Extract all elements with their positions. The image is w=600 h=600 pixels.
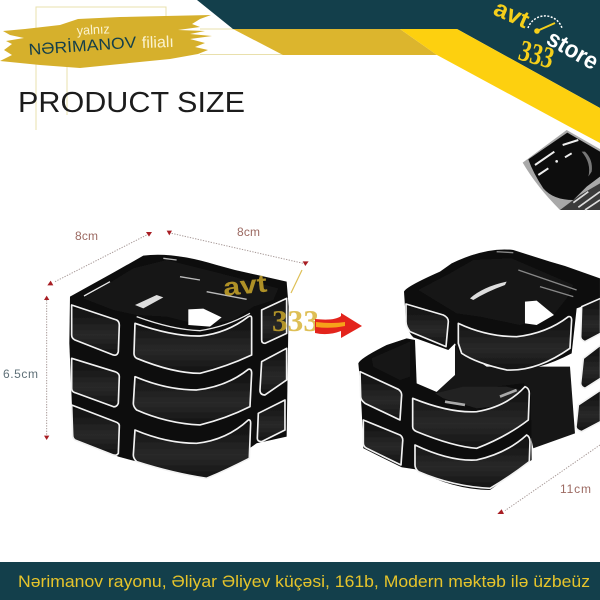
dimension label 11cm: 11cm bbox=[560, 482, 591, 496]
thumbnail product photo bbox=[523, 130, 600, 210]
header yellow band bbox=[400, 29, 600, 143]
dimension line: 8cm left bbox=[47, 232, 152, 285]
watermark avt 333 bbox=[222, 269, 319, 338]
footer bar bbox=[0, 562, 600, 600]
footer address text: Nərimanov rayonu, Əliyar Əliyev küçəsi, 161b, Modern məktəb ilə üzbeüz bbox=[18, 572, 590, 591]
logo: avt store 333 bbox=[490, 0, 600, 76]
cube front panels bbox=[133, 316, 252, 478]
cube left panels bbox=[72, 305, 119, 455]
dimension line: 11cm bbox=[497, 445, 600, 514]
lower tier front panels bbox=[413, 387, 530, 488]
upper tier opening bbox=[418, 258, 573, 325]
dimension label 8cm right: 8cm bbox=[237, 225, 260, 239]
cube opening bbox=[83, 260, 278, 325]
dimension line: 6.5cm height bbox=[44, 296, 49, 440]
upper tier left panel bbox=[406, 304, 448, 347]
logo gauge icon bbox=[528, 16, 562, 34]
watermark avt 333: 333 bbox=[272, 303, 319, 338]
back dark column bbox=[435, 345, 575, 448]
title: PRODUCT SIZE bbox=[18, 87, 245, 119]
red arrow bbox=[315, 313, 362, 338]
Nərimanov text: NƏRİMANOV bbox=[28, 32, 137, 59]
brush stroke bbox=[0, 15, 212, 68]
watermark avt 333: avt bbox=[222, 269, 269, 302]
right opened cube bbox=[358, 249, 600, 514]
lower tier left panels bbox=[360, 372, 403, 465]
header thin gold frame lines bbox=[36, 7, 283, 130]
upper tier body bbox=[404, 249, 600, 371]
logo number 333: 333 bbox=[515, 34, 558, 75]
dimension line: 8cm right bbox=[167, 231, 309, 266]
filiali text: filialı bbox=[142, 34, 174, 52]
left cube with dimensions bbox=[44, 231, 309, 478]
dimension label 8cm left: 8cm bbox=[75, 229, 98, 243]
right side panels bbox=[576, 298, 600, 432]
branch label on brush stroke bbox=[0, 15, 212, 68]
header dark teal banner bbox=[197, 0, 600, 108]
cube right panels bbox=[257, 298, 287, 442]
header dark gold band bbox=[233, 29, 437, 55]
cube interior see-through bbox=[188, 309, 222, 327]
lower tier highlights bbox=[445, 390, 517, 405]
upper tier see-through bbox=[525, 301, 554, 325]
cube body bbox=[69, 255, 289, 478]
lower tier opening bbox=[372, 342, 410, 380]
yalnız text: yalnız bbox=[76, 21, 110, 38]
lower tier body bbox=[358, 338, 532, 490]
cube top rim highlight bbox=[84, 282, 250, 331]
upper tier front panel bbox=[458, 317, 572, 370]
dimension label 6.5cm: 6.5cm bbox=[3, 367, 38, 381]
